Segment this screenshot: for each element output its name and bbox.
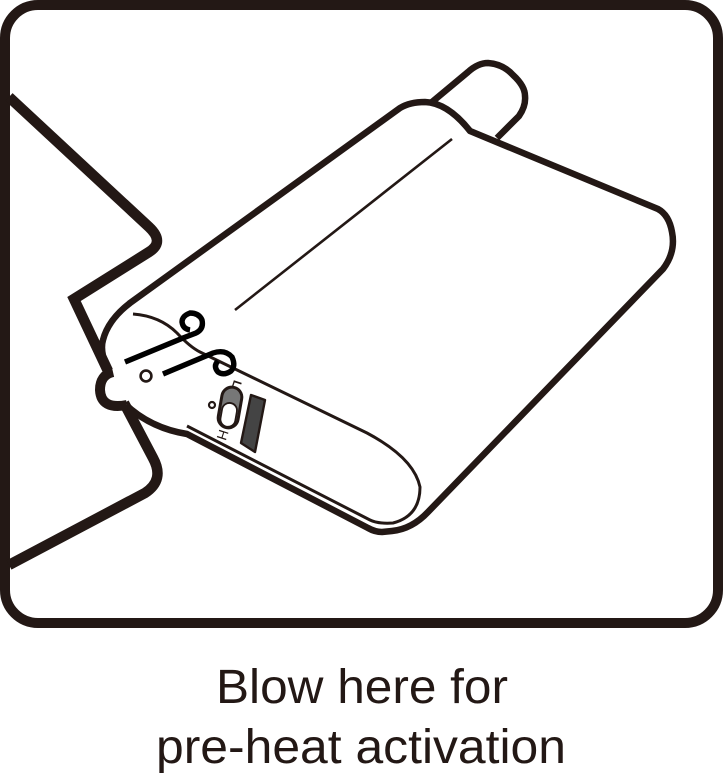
icon: device cap: [432, 63, 525, 138]
caption: [156, 661, 566, 774]
icon: indicator dot: [209, 402, 215, 408]
icon: lower finger: [9, 403, 158, 565]
icon: device body: [102, 102, 673, 532]
label: L: L: [229, 379, 245, 390]
caption line 2: pre-heat activation: [156, 721, 566, 774]
icon: upper finger: [9, 97, 157, 371]
icon: dark display strip: [241, 395, 265, 452]
icon: device nozzle bulge: [100, 372, 127, 406]
icon: air swirl upper: [125, 313, 202, 362]
panel: illustration frame: [5, 5, 718, 623]
label: H: H: [214, 428, 232, 442]
icon: small hole: [141, 371, 151, 381]
icon: front face panel outline: [133, 314, 420, 523]
icon: body seam line: [235, 139, 452, 310]
icon: air swirl lower: [163, 352, 234, 374]
icon: slide switch: [217, 386, 243, 429]
caption line 1: Blow here for: [216, 661, 508, 714]
